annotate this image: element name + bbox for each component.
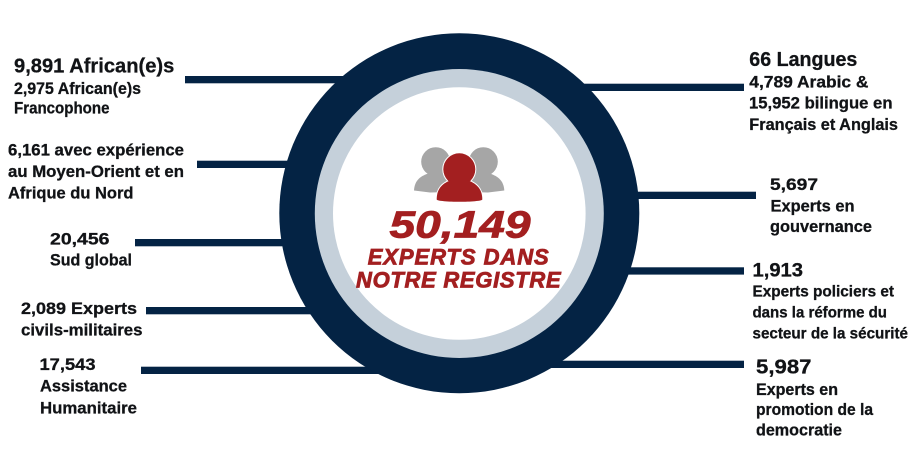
central total: NOTRE REGISTRE xyxy=(356,267,562,292)
central ring xyxy=(279,33,639,393)
stat: humanitarian assistance: Assistance xyxy=(40,377,127,396)
central total: 50,149 xyxy=(390,204,530,246)
stat: humanitarian assistance: Humanitaire xyxy=(40,398,137,417)
stat: democracy promotion: Experts en xyxy=(756,380,838,399)
stat: Middle East and North Africa xyxy=(8,141,184,203)
icon: group of people xyxy=(414,147,504,202)
stat: governance: 5,697 xyxy=(770,175,818,194)
stat: Middle East and North Africa: au Moyen-Orient et en xyxy=(8,162,184,181)
icon: lead person outline xyxy=(437,153,482,202)
stat: Global South: Sud global xyxy=(50,251,132,270)
connector bars xyxy=(135,76,756,374)
stat: police and security sector reform: Experts policiers et xyxy=(752,284,895,301)
stat: languages: 15,952 bilingue en xyxy=(749,94,892,113)
stat: police and security sector reform: secteur de la sécurité xyxy=(752,325,908,342)
stat: Global South xyxy=(50,230,132,270)
stat: languages xyxy=(749,49,898,134)
stat: African experts xyxy=(14,56,174,117)
stat: humanitarian assistance: 17,543 xyxy=(40,355,96,374)
stat: African experts: 9,891 African(e)s xyxy=(14,56,174,78)
stat: languages: 4,789 Arabic & xyxy=(749,73,868,92)
stat: democracy promotion: 5,987 xyxy=(756,356,812,378)
stat: police and security sector reform: 1,913 xyxy=(752,261,803,282)
central total: EXPERTS DANS xyxy=(368,244,549,269)
stat: democracy promotion: democratie xyxy=(756,421,842,440)
stat: African experts: Francophone xyxy=(14,99,110,117)
stat: languages: 66 Langues xyxy=(749,49,857,71)
stat: languages: Français et Anglais xyxy=(749,115,898,134)
stat: civil-military: civils-militaires xyxy=(21,321,142,340)
stat: democracy promotion xyxy=(756,356,874,440)
stat: Global South: 20,456 xyxy=(50,230,110,249)
icon: lead person xyxy=(437,153,482,202)
stat: democracy promotion: promotion de la xyxy=(756,400,874,419)
stat: Middle East and North Africa: 6,161 avec expérience xyxy=(8,141,184,160)
stat: governance: gouvernance xyxy=(770,217,872,236)
stat: police and security sector reform xyxy=(752,261,908,342)
stat: governance: Experts en xyxy=(770,197,854,216)
stat: police and security sector reform: dans la réforme du xyxy=(752,305,887,322)
stat: civil-military: 2,089 Experts xyxy=(21,299,137,318)
stat: governance xyxy=(770,175,872,236)
stat: civil-military xyxy=(21,299,142,340)
stat: humanitarian assistance xyxy=(40,355,137,417)
stat: Middle East and North Africa: Afrique du Nord xyxy=(8,184,134,203)
central total xyxy=(356,204,562,292)
stat: African experts: 2,975 African(e)s xyxy=(14,80,141,98)
